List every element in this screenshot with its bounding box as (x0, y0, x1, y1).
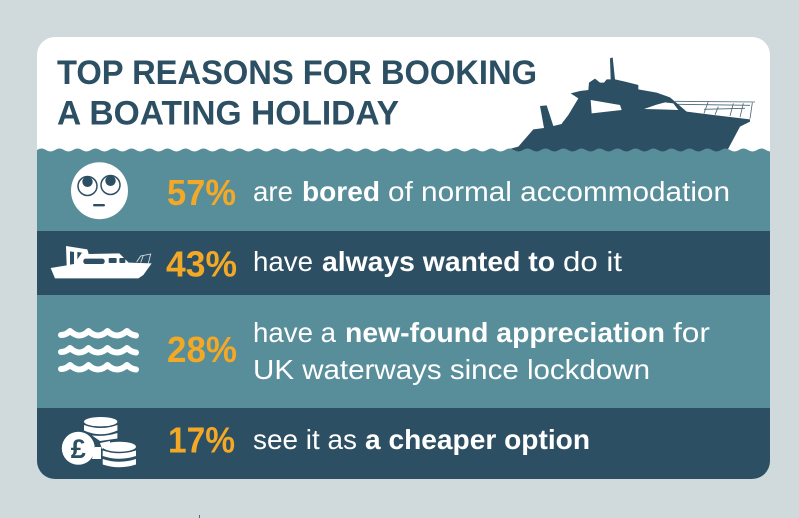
statement: cheaper option (254, 429, 588, 455)
statement: new-found appreciation: have a (253, 317, 336, 348)
statistic: 17%: 17% (168, 420, 235, 460)
wave edge of water (37, 148, 770, 153)
infographic card (37, 37, 775, 479)
statement: always wanted to: do it (563, 246, 622, 277)
pound sign: £ (71, 434, 86, 464)
statistic: 43%: 43% (166, 244, 237, 284)
icon: eye-rolling face (71, 162, 128, 219)
statement: new-found appreciation: new-found appreciation (345, 317, 665, 348)
icon: cabin cruiser (51, 246, 152, 278)
statement: new-found appreciation (253, 317, 710, 385)
statement: new-found appreciation: UK waterways since lockdown (253, 354, 650, 385)
icon: waves (61, 331, 136, 370)
statement: cheaper option: a cheaper option (365, 424, 590, 455)
statistic: 57%: 57% (167, 172, 236, 213)
header panel (37, 37, 770, 157)
statement: bored: are (253, 176, 293, 207)
statement: always wanted to: always wanted to (322, 246, 555, 277)
row 2: always wanted to do it (37, 231, 770, 295)
statement: bored: of normal accommodation (388, 176, 730, 207)
row 3: new-found appreciation (37, 295, 770, 408)
statement: always wanted to (254, 251, 622, 277)
statement: bored: bored (302, 176, 380, 207)
statistic: 28%: 28% (167, 329, 237, 370)
statement: new-found appreciation: for (673, 317, 710, 348)
row 4: cheaper option (37, 408, 770, 479)
title: TOP REASONS FOR BOOKING (57, 54, 537, 92)
title: A BOATING HOLIDAY (57, 94, 399, 132)
icon: coins and pound (62, 417, 136, 467)
title (57, 60, 536, 125)
icon: motor yacht silhouette (510, 57, 755, 152)
row 1: bored of normal accommodation (37, 153, 770, 231)
statement: cheaper option: see it as (253, 424, 357, 455)
statement: bored (254, 181, 728, 202)
statement: always wanted to: have (253, 246, 313, 277)
